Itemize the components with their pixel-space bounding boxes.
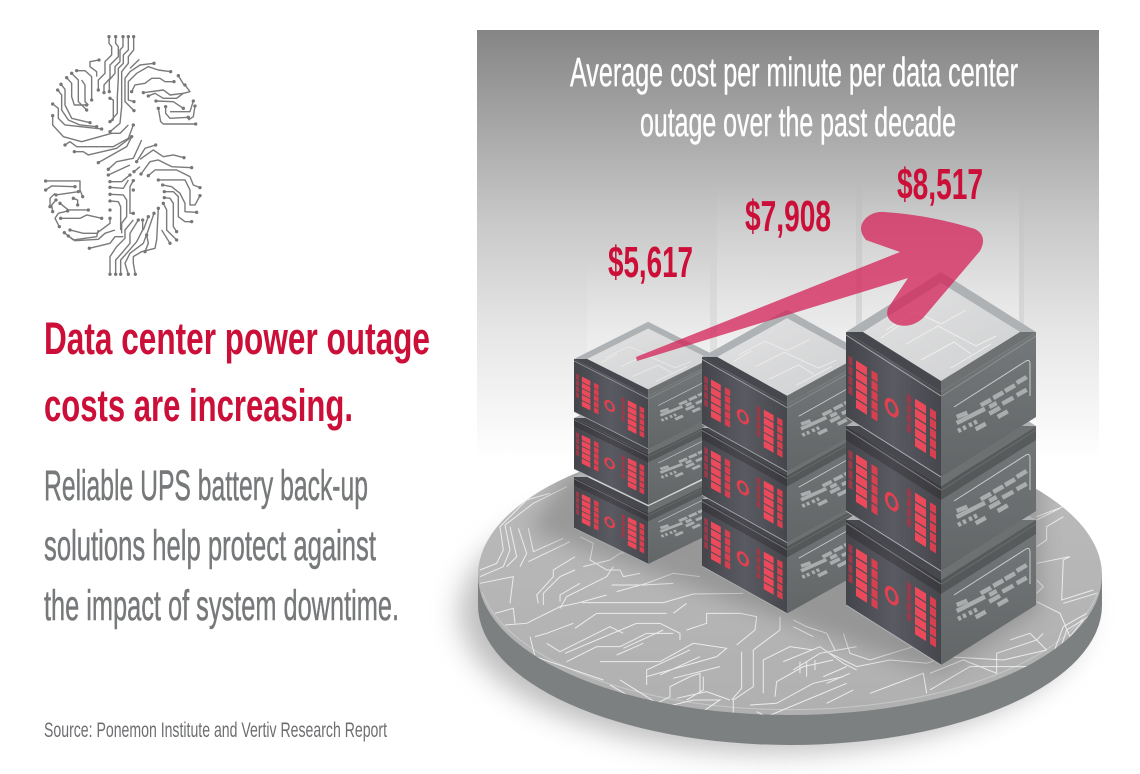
supporting text: the impact of system downtime.	[44, 582, 399, 630]
icon: upward trend arrow	[636, 212, 983, 361]
value labels: $8,517	[897, 160, 983, 209]
value labels	[608, 160, 983, 287]
server stack: $5,617	[574, 322, 722, 564]
background gradient panel	[477, 30, 1099, 460]
platter shadows cast by server stacks	[530, 470, 1040, 675]
value labels: $7,908	[745, 192, 831, 241]
supporting text	[44, 462, 399, 630]
headline	[44, 313, 430, 431]
translucent value beams	[587, 180, 1024, 425]
circuit board platter	[478, 435, 1102, 745]
value labels: $5,617	[608, 238, 693, 287]
chart title	[570, 49, 1018, 145]
server stack: $8,517	[846, 272, 1036, 665]
platter circuit traces	[480, 487, 1097, 717]
supporting text: solutions help protect against	[44, 522, 376, 570]
server stack: $7,908	[702, 310, 872, 614]
supporting text: Reliable UPS battery back-up	[44, 462, 368, 510]
headline: costs are increasing.	[44, 380, 353, 431]
platter drop shadow	[460, 472, 1084, 752]
headline: Data center power outage	[44, 313, 430, 364]
source note: Source: Ponemon Institute and Vertiv Research Report	[44, 719, 387, 742]
icon: circuit dollar sign	[44, 35, 202, 276]
